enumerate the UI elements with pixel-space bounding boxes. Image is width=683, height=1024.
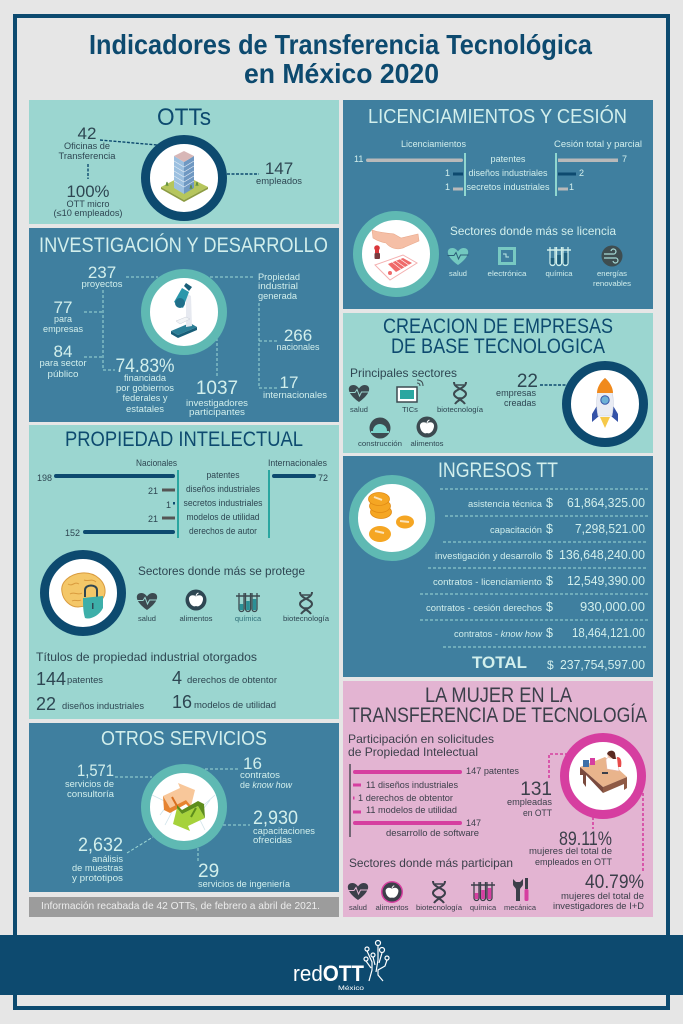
table: ingresos por concepto: asistencia técnica (468, 499, 542, 509)
bar chart: licenciamientos y cesión: 7 (622, 154, 627, 164)
stat: 22 empresas creadas: empresas (496, 388, 537, 398)
table: ingresos por concepto (426, 496, 645, 640)
table: ingresos por concepto: 18,464,121.00 (572, 626, 645, 640)
bar chart: nacionales e internacionales: Internacionales (268, 458, 327, 468)
table: ingresos por concepto: capacitación (490, 525, 542, 535)
stat: 89.11%: mujeres del total de (529, 846, 612, 856)
panel: Propiedad intelectual (29, 425, 339, 719)
stat: 77 para empresas (43, 298, 84, 334)
stat: 2,632 análisis: análisis (92, 854, 124, 864)
stat: 29 ingeniería: 29 (198, 861, 219, 882)
stat: 4 derechos de obtentor (172, 668, 277, 688)
stat: 131 empleadas (507, 779, 553, 818)
heading: La mujer en la transferencia (349, 684, 647, 727)
stat: 42 oficinas: Transferencia (58, 151, 116, 161)
stat: 16 contratos know how: contratos (240, 770, 281, 780)
stat: 1,571 consultoría: consultoría (67, 789, 114, 799)
table: ingresos por concepto: $ (546, 600, 553, 614)
stat: 237 proyectos (82, 263, 123, 289)
bar chart: nacionales e internacionales: patentes (206, 470, 240, 480)
stat: 2,930 capacitaciones: capacitaciones (253, 826, 316, 836)
stat: 131 empleadas: en OTT (523, 808, 552, 818)
stat: 40.79%: 40.79% (585, 872, 644, 893)
bar chart: nacionales e internacionales: secretos industriales (184, 498, 263, 508)
stat: 40.79%: investigadores de I+D (553, 901, 645, 911)
stat: 17 internacionales (263, 373, 328, 400)
stat: 266 nacionales: 266 (284, 326, 312, 345)
stat: 22 empresas creadas (496, 371, 538, 408)
stat: 1,571 consultoría: servicios de (65, 779, 114, 789)
heading: sectores donde más se licencia: Sectores donde más se licencia (450, 224, 616, 238)
bar chart: licenciamientos y cesión: 1 (445, 182, 450, 192)
stat: 16 contratos know how (240, 754, 292, 790)
title: Indicadores de Transferencia Tecnológica (89, 29, 592, 60)
icon: alimentos: alimentos (376, 903, 409, 912)
icon: building (146, 140, 222, 216)
bar chart: nacionales e internacionales: 1 (166, 500, 171, 510)
stat: 22 diseños industriales: 22 (36, 694, 56, 714)
stat: 42 oficinas (58, 124, 116, 161)
stat: 40.79% (553, 872, 645, 911)
stat: 84 para sector público: para sector (40, 358, 86, 368)
stat: 74.83% financiada: estatales (126, 404, 165, 414)
source note (29, 897, 339, 917)
stat: 4 derechos de obtentor: 4 (172, 668, 182, 688)
icon: electrónica (488, 247, 527, 278)
stat: 74.83% financiada: 74.83% (116, 356, 175, 377)
icon: salud: salud (349, 903, 367, 912)
heading: OTTs: OTTs (157, 104, 211, 131)
stat: 74.83% financiada: federales y (122, 393, 168, 403)
bar chart: licenciamientos y cesión: Cesión total y parcial (554, 139, 642, 149)
divider lines (420, 489, 648, 647)
icon: biotecnología: biotecnología (283, 614, 330, 623)
stat: 74.83% financiada: financiada (124, 373, 166, 383)
icon: brain with padlock (44, 554, 122, 632)
stat: 237 proyectos: 237 (88, 263, 116, 282)
icon: TICs (397, 380, 423, 414)
icon: alimentos: alimentos (180, 614, 213, 623)
stat: 100% OTT micro: (≤10 empleados) (54, 208, 122, 218)
bar chart: nacionales e internacionales: Nacionales (136, 458, 177, 468)
table: ingresos por concepto: 61,864,325.00 (567, 496, 645, 510)
bar chart: solicitudes: 147 (466, 818, 481, 828)
stat: 2,930 capacitaciones (253, 808, 316, 845)
total: 237,754,597.00 (560, 658, 645, 672)
bar chart: nacionales e internacionales: diseños industriales (186, 484, 260, 494)
stat: 266 nacionales: nacionales (276, 342, 320, 352)
bar chart: nacionales e internacionales: 198 (37, 473, 52, 483)
bar chart: licenciamientos y cesión: patentes (490, 154, 526, 164)
table: ingresos por concepto: 136,648,240.00 (559, 548, 645, 562)
heading: Creación de empresas: DE BASE TECNOLOGICA (391, 335, 605, 358)
total: $ (547, 658, 554, 672)
stat: 2,632 análisis: 2,632 (78, 835, 123, 856)
panel: Licenciamientos y cesión (343, 100, 653, 309)
icon: química (235, 593, 262, 623)
stat: 89.11%: 89.11% (559, 829, 612, 850)
icon: salud (348, 883, 368, 912)
icon: química (546, 247, 573, 278)
panel: Ingresos TT (343, 456, 653, 677)
stat: 2,632 análisis: y prototipos (72, 873, 124, 883)
heading: participación: de Propiedad Intelectual (348, 745, 478, 759)
stat: 84 para sector público: público (48, 369, 78, 379)
stat: 16 contratos know how: de know how (240, 780, 292, 790)
icon: energías renovables (593, 246, 631, 288)
table: ingresos por concepto: $ (546, 496, 553, 510)
icon: química: química (235, 614, 262, 623)
stat: 147 empleados (256, 159, 303, 186)
icon: química: química (470, 903, 497, 912)
connectors (88, 140, 259, 179)
icon: alimentos (410, 416, 444, 448)
icon: TICs: TICs (402, 405, 418, 414)
stat: 89.11%: empleados en OTT (535, 857, 612, 867)
heading: La mujer en la transferencia: LA MUJER EN LA (425, 684, 572, 707)
connectors (115, 769, 250, 862)
stat: 42 oficinas: 42 (78, 124, 96, 143)
stat: 40.79%: mujeres del total de (561, 891, 644, 901)
icon: alimentos (376, 881, 409, 912)
stat: 100% OTT micro: 100% (66, 182, 110, 201)
stat: 29 ingeniería (198, 861, 290, 889)
icon: biotecnología (437, 382, 484, 414)
stat: 100% OTT micro: OTT micro (66, 199, 110, 209)
stat: 147 empleados: empleados (256, 176, 303, 186)
panel: Investigación y desarrollo (29, 228, 339, 422)
bar chart: licenciamientos y cesión: secretos industriales (466, 182, 550, 192)
heading: Licenciamientos y cesión: LICENCIAMIENTOS Y CESIÓN (368, 105, 627, 128)
table: ingresos por concepto: contratos - licenciamiento (433, 577, 542, 587)
heading: participación (348, 732, 494, 759)
heading: Creación de empresas: CREACION DE EMPRESAS (383, 315, 613, 338)
stat: 84 para sector público (40, 342, 86, 379)
panel: La mujer en la transferencia (343, 681, 653, 917)
icon: rocket (566, 366, 644, 442)
icon: salud (348, 385, 370, 414)
stat: 77 para empresas: para (54, 314, 72, 324)
heading: principales sectores: Principales sectores (350, 366, 457, 380)
logo: redOTT México (293, 940, 389, 992)
stat: 131 empleadas: 131 (520, 779, 552, 800)
icon: mecánica: mecánica (504, 903, 537, 912)
heading: Otros servicios: OTROS SERVICIOS (101, 728, 267, 750)
stat: propiedad industrial generada: industrial (258, 281, 298, 291)
panel: Creación de empresas (343, 313, 653, 453)
stat: 16 modelos de utilidad (172, 692, 276, 712)
stat: 144 patentes: 144 (36, 669, 66, 689)
stat: 42 oficinas: Oficinas de (64, 141, 110, 151)
bar chart: licenciamientos y cesión: 11 (354, 154, 363, 164)
stat: 84 para sector público: 84 (54, 342, 72, 361)
bar chart: nacionales e internacionales: modelos de utilidad (186, 512, 260, 522)
stat: 29 ingeniería: servicios de ingeniería (198, 879, 290, 889)
stat: 237 proyectos: proyectos (82, 279, 123, 289)
bar chart: licenciamientos y cesión (354, 139, 642, 196)
icon: salud (448, 248, 468, 278)
table: ingresos por concepto: investigación y desarrollo (435, 551, 542, 561)
bar chart: nacionales e internacionales: 152 (65, 528, 80, 538)
bar chart: licenciamientos y cesión: 2 (579, 168, 584, 178)
icon: biotecnología: biotecnología (437, 405, 484, 414)
logo: redOTT México: México (338, 985, 364, 992)
stat: 144 patentes (36, 669, 104, 689)
icon: mecánica (504, 878, 537, 912)
icon: construcción (358, 418, 402, 448)
icon: química: química (546, 269, 573, 278)
heading: Investigación y desarrollo: INVESTIGACIÓN Y DESARROLLO (39, 234, 328, 257)
bar chart: solicitudes (350, 764, 520, 838)
icon: handshake and patent (358, 216, 434, 292)
stat: 77 para empresas: 77 (54, 298, 72, 317)
stat: propiedad industrial generada: generada (258, 291, 297, 301)
total: TOTAL (472, 653, 527, 672)
panel: Otros servicios (29, 723, 339, 892)
stat: 266 nacionales (276, 326, 320, 352)
stat: 2,632 análisis (72, 835, 124, 883)
bar chart: nacionales e internacionales: 21 (148, 486, 158, 496)
icon: energías renovables: energías (597, 269, 627, 278)
table: ingresos por concepto: contratos - know how (454, 629, 543, 639)
table: ingresos por concepto: 7,298,521.00 (575, 522, 645, 536)
stat: 74.83% financiada: por gobiernos (116, 383, 175, 393)
stat: 17 internacionales: 17 (280, 373, 298, 392)
bar chart: solicitudes: 147 patentes (466, 766, 520, 776)
total (472, 653, 645, 672)
stat: 74.83% financiada (116, 356, 175, 414)
heading: Ingresos TT: INGRESOS TT (438, 459, 558, 482)
bar chart: nacionales e internacionales: derechos de autor (189, 526, 257, 536)
stat: propiedad industrial generada (258, 272, 300, 301)
icon: energías renovables: renovables (593, 279, 631, 288)
connectors (549, 754, 643, 873)
stat: 16 modelos de utilidad: 16 (172, 692, 192, 712)
stat: 131 empleadas: empleadas (507, 797, 553, 807)
footer band (0, 935, 683, 995)
bar chart: solicitudes: 1 derechos de obtentor (358, 793, 453, 803)
icon: coins (354, 480, 430, 556)
stat: 89.11% (529, 829, 612, 867)
logo: redOTT México: redOTT (293, 961, 365, 986)
icon: woman at desk (564, 738, 642, 814)
bar chart: solicitudes: 11 diseños industriales (366, 780, 459, 790)
icon: alimentos: alimentos (410, 439, 444, 448)
stat: 77 para empresas: empresas (43, 324, 84, 334)
icon: electrónica: electrónica (488, 269, 527, 278)
stat: propiedad industrial generada: Propiedad (258, 272, 300, 282)
bar chart: solicitudes: 11 modelos de utilidad (366, 805, 457, 815)
stat: 2,632 análisis: de muestras (72, 863, 124, 873)
bar chart: nacionales e internacionales: 21 (148, 514, 158, 524)
stat: 22 empresas creadas: 22 (517, 371, 538, 392)
stat: 22 diseños industriales: diseños industriales (62, 701, 145, 711)
connector (540, 384, 567, 386)
heading: participación: Participación en solicitudes (348, 732, 494, 746)
stat: 1,571 consultoría (65, 761, 114, 799)
heading: sectores donde más participan: Sectores donde más participan (349, 856, 513, 870)
stat: 22 empresas creadas: creadas (504, 398, 536, 408)
icon: alimentos (180, 590, 213, 623)
icon: salud: salud (138, 614, 156, 623)
stat: 1037 investigadores (186, 378, 249, 417)
icon: exchange arrows (146, 768, 222, 846)
icon: biotecnología (416, 881, 463, 912)
icon: biotecnología: biotecnología (416, 903, 463, 912)
table: ingresos por concepto: $ (546, 574, 553, 588)
bar chart: licenciamientos y cesión: Licenciamientos (401, 139, 466, 149)
bar chart: licenciamientos y cesión: diseños industriales (468, 168, 548, 178)
heading: títulos otorgados: Títulos de propiedad industrial otorgados (36, 650, 257, 664)
icon: salud: salud (350, 405, 368, 414)
bar chart: nacionales e internacionales (37, 458, 328, 538)
icon: biotecnología (283, 592, 330, 623)
stat: 100% OTT micro (54, 182, 122, 218)
table: ingresos por concepto: 12,549,390.00 (567, 574, 645, 588)
icon: construcción: construcción (358, 439, 402, 448)
stat: 16 modelos de utilidad: modelos de utilidad (194, 700, 276, 710)
table: ingresos por concepto: $ (546, 626, 553, 640)
title: en México 2020 (244, 58, 439, 89)
bar chart: solicitudes: desarrollo de software (386, 828, 479, 838)
panel: OTTs (29, 100, 339, 224)
stat: 17 internacionales: internacionales (263, 390, 328, 400)
stat: 1,571 consultoría: 1,571 (77, 761, 114, 780)
source note: Información recabada de 42 OTTs, de febrero a abril de 2021. (41, 900, 320, 912)
icon: salud: salud (449, 269, 467, 278)
stat: 1037 investigadores: participantes (189, 407, 246, 417)
table: ingresos por concepto: contratos - cesión derechos (426, 603, 543, 613)
table: ingresos por concepto: $ (546, 548, 553, 562)
table: ingresos por concepto: $ (546, 522, 553, 536)
stat: 1037 investigadores: 1037 (196, 378, 238, 399)
bar chart: nacionales e internacionales: 72 (318, 473, 328, 483)
stat: 4 derechos de obtentor: derechos de obtentor (187, 675, 277, 685)
stat: 22 diseños industriales (36, 694, 145, 714)
stat: 147 empleados: 147 (265, 159, 293, 178)
bar chart: licenciamientos y cesión: 1 (569, 182, 574, 192)
bar chart: licenciamientos y cesión: 1 (445, 168, 450, 178)
stat: 2,930 capacitaciones: 2,930 (253, 808, 298, 829)
heading: sectores donde más se protege: Sectores donde más se protege (138, 564, 305, 578)
connectors (84, 277, 277, 388)
table: ingresos por concepto: 930,000.00 (580, 600, 645, 614)
stat: 16 contratos know how: 16 (243, 754, 262, 773)
icon: salud (136, 593, 158, 623)
heading: Creación de empresas (383, 315, 613, 358)
stat: 144 patentes: patentes (67, 675, 104, 685)
stat: 2,930 capacitaciones: ofrecidas (253, 835, 293, 845)
stat: 1037 investigadores: investigadores (186, 398, 249, 408)
title (89, 29, 592, 89)
icon: microscope (146, 274, 222, 350)
icon: química (470, 882, 497, 912)
heading: Propiedad intelectual: PROPIEDAD INTELECTUAL (65, 428, 303, 451)
